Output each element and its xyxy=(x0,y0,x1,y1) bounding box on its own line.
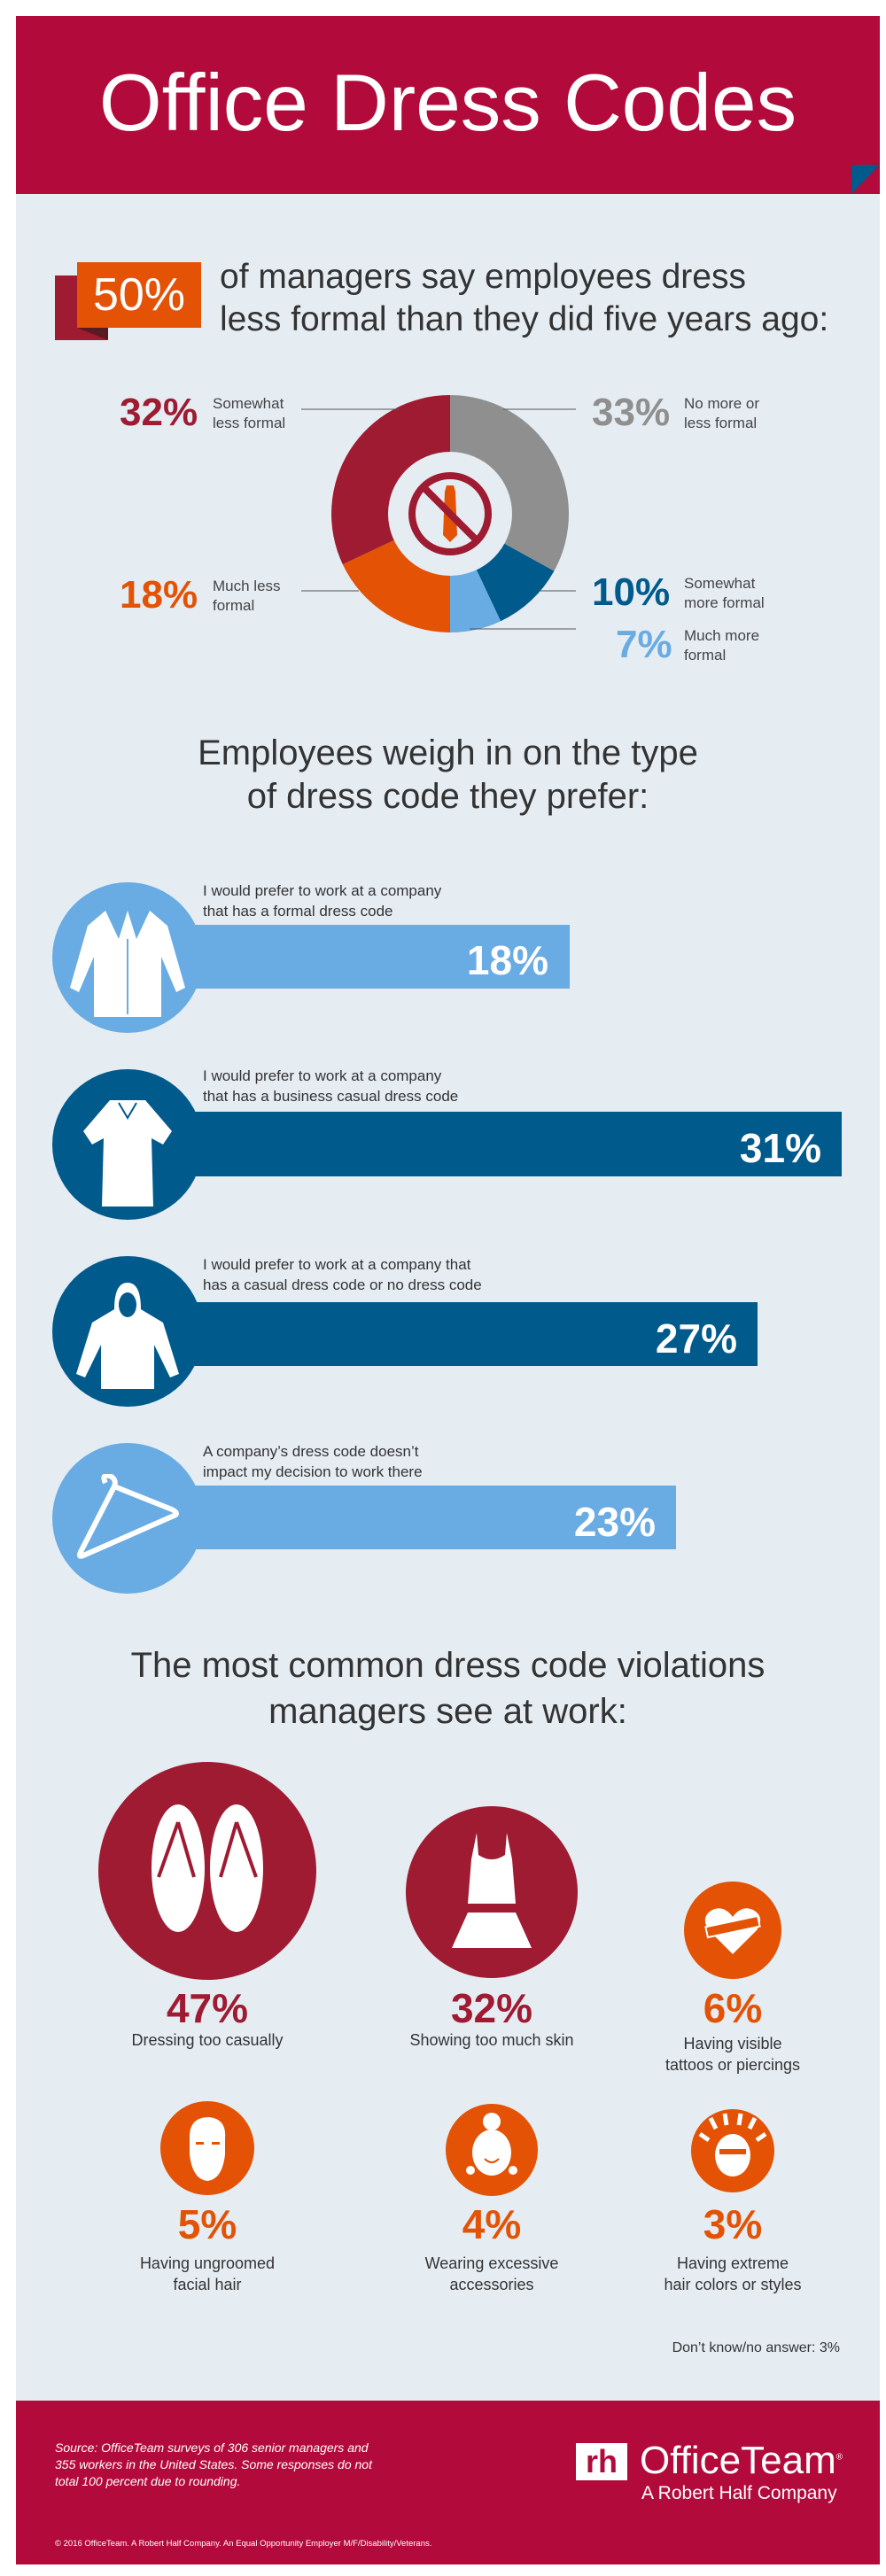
icon: tank top and skirt xyxy=(406,1806,578,1978)
icon: polo shirt xyxy=(83,1100,172,1207)
label 33% xyxy=(592,391,759,434)
title: Office Dress Codes xyxy=(99,58,797,148)
header banner xyxy=(16,16,880,194)
label 18%: formal xyxy=(213,597,254,614)
violation: facial hair 5%: facial hair xyxy=(173,2276,242,2293)
violation: accessories 4%: 4% xyxy=(462,2201,521,2247)
violation: accessories 4%: Wearing excessive xyxy=(425,2254,558,2272)
row: casual 27%: I would prefer to work at a company that xyxy=(203,1256,470,1273)
label 32%: Somewhat xyxy=(213,395,284,412)
row: business casual 31%: I would prefer to work at a company xyxy=(203,1067,441,1084)
label 33%: less formal xyxy=(684,415,757,431)
label 33%: 33% xyxy=(592,391,670,434)
violation: hair 3%: hair colors or styles xyxy=(664,2276,802,2293)
label 32%: 32% xyxy=(120,391,198,434)
label 32%: less formal xyxy=(213,415,285,431)
label 18%: 18% xyxy=(120,573,198,617)
row: formal 18%: I would prefer to work at a company xyxy=(203,882,441,899)
logo: rh xyxy=(586,2443,618,2479)
icon: tattoo heart xyxy=(684,1882,781,1979)
source text xyxy=(55,2440,372,2488)
donut chart xyxy=(301,395,576,632)
source text: 355 workers in the United States. Some responses do not xyxy=(55,2457,372,2471)
row: no impact 23%: impact my decision to work there xyxy=(203,1463,423,1480)
heading: preferences: Employees weigh in on the type xyxy=(198,733,698,772)
label 18% xyxy=(120,573,281,617)
heading: violations: managers see at work: xyxy=(268,1692,627,1731)
label 7%: 7% xyxy=(616,623,672,666)
statement text: less formal than they did five years ago: xyxy=(220,300,828,338)
statement text: of managers say employees dress xyxy=(220,258,746,296)
heading: preferences xyxy=(198,733,698,816)
icon: jacket xyxy=(70,911,185,1017)
fold corner xyxy=(851,165,880,194)
label 7% xyxy=(616,623,759,666)
note: don't know: Don’t know/no answer: 3% xyxy=(672,2340,840,2355)
icon: bearded man xyxy=(160,2101,254,2195)
heading: violations: The most common dress code violations xyxy=(131,1646,765,1685)
label 18%: Much less xyxy=(213,578,281,594)
row: casual 27%: 27% xyxy=(656,1315,737,1362)
violation: tattoos 6%: tattoos or piercings xyxy=(665,2056,800,2074)
label 10%: Somewhat xyxy=(684,575,755,592)
heading: violations xyxy=(131,1646,765,1731)
row: formal 18%: 18% xyxy=(467,937,548,983)
violation: tattoos 6% xyxy=(665,1882,800,2074)
row: no impact 23%: 23% xyxy=(574,1499,656,1545)
footer xyxy=(16,2401,880,2564)
row: formal 18% xyxy=(52,882,570,1033)
source text: total 100 percent due to rounding. xyxy=(55,2474,240,2488)
statement text xyxy=(220,258,828,338)
violation: accessories 4% xyxy=(425,2104,558,2293)
icon: woman with earrings xyxy=(446,2104,538,2196)
logo xyxy=(576,2439,843,2503)
row: business casual 31% xyxy=(52,1067,842,1220)
icon: hoodie xyxy=(76,1283,179,1389)
label 10%: more formal xyxy=(684,594,765,611)
violation: skin 32%: Showing too much skin xyxy=(409,2031,574,2049)
violation: tattoos 6%: 6% xyxy=(703,1985,762,2031)
label 10% xyxy=(592,570,765,614)
label 33%: No more or xyxy=(684,395,759,412)
violation: casual 47% xyxy=(98,1762,316,2049)
label 10%: 10% xyxy=(592,570,670,614)
50% box: 50% xyxy=(93,269,185,321)
violation: casual 47%: Dressing too casually xyxy=(131,2031,284,2049)
icon: hanger xyxy=(76,1474,179,1559)
violation: skin 32% xyxy=(406,1806,578,2049)
icon: wild hair xyxy=(691,2109,774,2192)
violation: facial hair 5%: Having ungroomed xyxy=(140,2254,275,2272)
violation: skin 32%: 32% xyxy=(451,1985,532,2031)
row: business casual 31%: that has a business casual dress code xyxy=(203,1088,458,1105)
label 32% xyxy=(120,391,285,434)
50% box xyxy=(77,262,201,328)
violation: tattoos 6%: Having visible xyxy=(683,2035,782,2052)
row: no impact 23% xyxy=(52,1443,676,1594)
label 7%: Much more xyxy=(684,627,759,644)
row: casual 27%: has a casual dress code or no dress code xyxy=(203,1276,482,1293)
logo: A Robert Half Company xyxy=(641,2483,837,2503)
source text: Source: OfficeTeam surveys of 306 senior managers and xyxy=(55,2440,369,2455)
violation: hair 3%: 3% xyxy=(703,2201,762,2247)
violation: accessories 4%: accessories xyxy=(449,2276,534,2293)
label 7%: formal xyxy=(684,647,726,663)
violation: facial hair 5%: 5% xyxy=(178,2201,237,2247)
copyright: © 2016 OfficeTeam. A Robert Half Company. An Equal Opportunity Employer M/F/Disability/Veterans. xyxy=(55,2539,431,2549)
stat: 50% xyxy=(55,258,828,340)
violation: hair 3% xyxy=(664,2109,802,2293)
icon: flip flops xyxy=(98,1762,316,1980)
row: casual 27% xyxy=(52,1256,758,1407)
row: formal 18%: that has a formal dress code xyxy=(203,903,393,919)
row: no impact 23%: A company’s dress code doesn’t xyxy=(203,1443,418,1460)
violation: facial hair 5% xyxy=(140,2101,275,2293)
heading: preferences: of dress code they prefer: xyxy=(247,777,649,816)
row: business casual 31%: 31% xyxy=(740,1125,821,1171)
logo: OfficeTeam® xyxy=(640,2439,843,2482)
violation: casual 47%: 47% xyxy=(167,1985,248,2031)
violation: hair 3%: Having extreme xyxy=(677,2254,789,2272)
